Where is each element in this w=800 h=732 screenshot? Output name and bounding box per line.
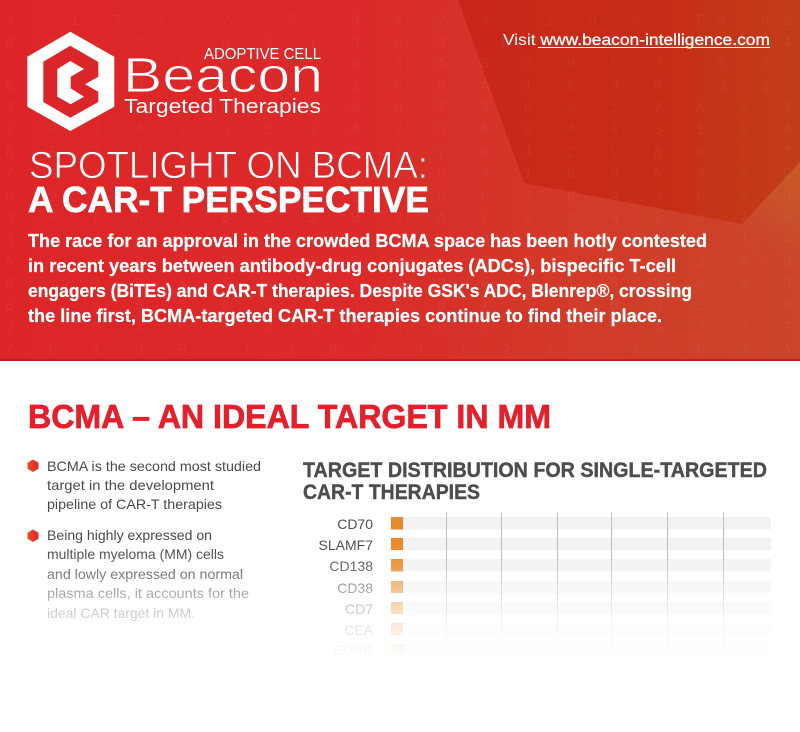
bullet list: target in the development bbox=[47, 477, 214, 493]
panel: red header banner bbox=[0, 0, 800, 361]
icon: bullet hexagon bbox=[28, 530, 38, 542]
bar chart: CEA bbox=[344, 622, 374, 638]
intro text block: in recent years between antibody-drug conjugates (ADCs), bispecific T-cell bbox=[28, 255, 676, 276]
logo wordmark bbox=[123, 46, 323, 118]
intro text block: engagers (BiTEs) and CAR-T therapies. Despite GSK's ADC, Blenrep®, crossing bbox=[28, 280, 692, 301]
website link: Visit www.beacon-intelligence.com bbox=[503, 32, 770, 49]
bullet list: and lowly expressed on normal bbox=[47, 566, 243, 582]
chart title: TARGET DISTRIBUTION FOR SINGLE-TARGETED bbox=[303, 459, 767, 482]
bullet list: pipeline of CAR-T therapies bbox=[47, 496, 222, 512]
title: SPOTLIGHT ON BCMA: bbox=[29, 145, 428, 187]
logo wordmark: ADOPTIVE CELL bbox=[204, 46, 321, 63]
bar chart: CD138 bbox=[329, 558, 373, 574]
heading: BCMA ideal target: BCMA – AN IDEAL TARGET IN MM bbox=[28, 398, 551, 435]
bullet list: BCMA is the second most studied bbox=[47, 458, 261, 474]
icon: Beacon hexagon logo bbox=[27, 32, 114, 131]
intro text block bbox=[28, 230, 707, 326]
bar chart: CD38 bbox=[337, 580, 373, 596]
chart title: CAR-T THERAPIES bbox=[303, 481, 480, 504]
intro text block: The race for an approval in the crowded BCMA space has been hotly contested bbox=[28, 230, 707, 251]
chart title bbox=[303, 459, 767, 504]
bullet list: Being highly expressed on bbox=[47, 527, 212, 543]
bullet list: ideal CAR target in MM. bbox=[47, 605, 195, 621]
bar chart: CD70 bbox=[337, 516, 373, 532]
intro text block: the line first, BCMA-targeted CAR-T therapies continue to find their place. bbox=[28, 305, 662, 326]
logo wordmark: Beacon bbox=[123, 49, 323, 103]
bullet list: multiple myeloma (MM) cells bbox=[47, 546, 224, 562]
bullet list bbox=[28, 458, 261, 621]
bar chart bbox=[319, 512, 771, 658]
icon: bullet hexagon bbox=[28, 460, 38, 472]
bullet list: plasma cells, it accounts for the bbox=[47, 585, 249, 601]
bar chart: CD7 bbox=[345, 601, 373, 617]
bar chart: SLAMF7 bbox=[319, 537, 373, 553]
logo wordmark: Targeted Therapies bbox=[124, 96, 321, 118]
white fade overlay bbox=[0, 545, 800, 732]
title: A CAR-T PERSPECTIVE bbox=[28, 179, 429, 220]
title bbox=[28, 145, 429, 220]
bar chart: EGFR bbox=[334, 642, 373, 658]
